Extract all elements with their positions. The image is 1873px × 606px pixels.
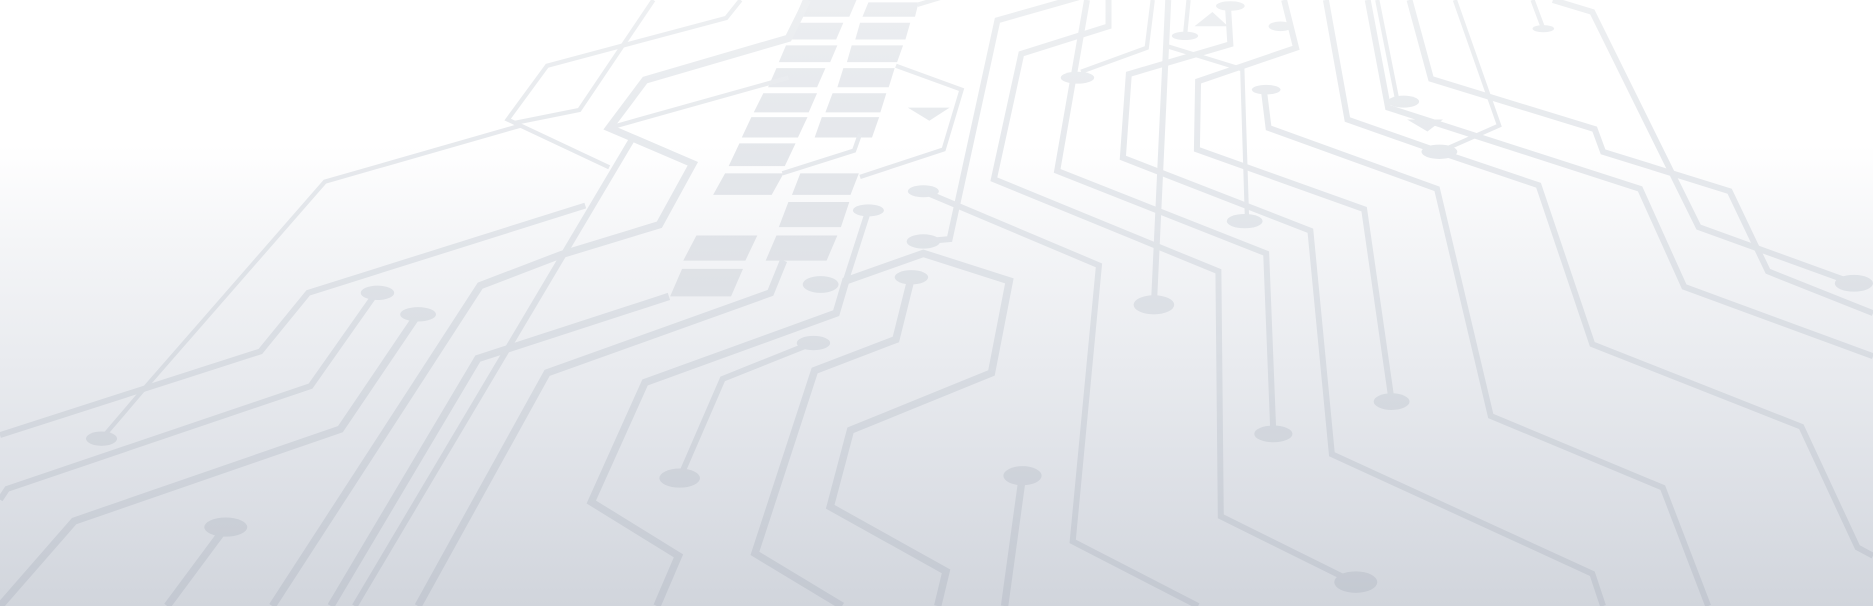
traces: centre <box>591 0 1708 606</box>
small triangle markers <box>908 12 1443 131</box>
traces: left side <box>0 0 965 606</box>
traces: right side <box>1326 0 1873 556</box>
chip blocks <box>670 0 919 296</box>
